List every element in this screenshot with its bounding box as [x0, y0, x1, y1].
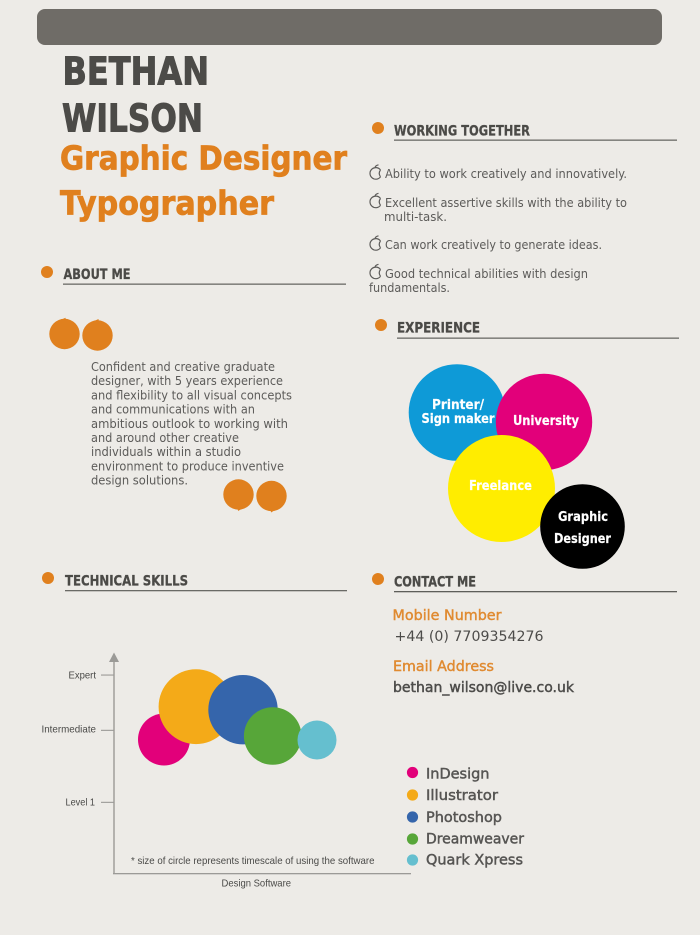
text: about me description: and communications with an [91, 403, 255, 417]
list: working together items: Good technical abilities with design [385, 267, 588, 281]
list: working together items [369, 165, 627, 295]
circle: university: University [513, 414, 579, 429]
heading: about me [41, 266, 346, 285]
top header bar [37, 9, 662, 45]
legend: design software: Photoshop [426, 810, 502, 826]
text: about me description: ambitious outlook to working with [91, 417, 288, 431]
circle: freelance [448, 435, 555, 542]
list: working together items: Excellent assertive skills with the ability to [385, 196, 627, 210]
panel: working together [369, 122, 677, 295]
circle: university [496, 374, 592, 470]
legend: design software: Illustrator [426, 788, 498, 804]
text: about me description: Confident and creative graduate [91, 360, 275, 374]
panel: contact me [372, 573, 677, 696]
axis labels: Expert [68, 670, 96, 682]
title: name and role [60, 50, 348, 222]
text: about me description: individuals within a studio [91, 445, 241, 459]
heading: contact me [372, 573, 677, 592]
circle: graphic designer: Graphic [558, 510, 608, 525]
contact: email address: bethan_wilson@live.co.uk [393, 680, 575, 696]
circle: freelance: Freelance [469, 479, 532, 494]
legend: design software: Dreamweaver [426, 832, 524, 848]
heading: technical skills: TECHNICAL SKILLS [65, 574, 188, 590]
axis labels: Intermediate [42, 724, 96, 736]
icon: opening quote marks [49, 318, 113, 351]
circle: graphic designer [540, 484, 625, 569]
list: working together items: Can work creatively to generate ideas. [385, 238, 602, 252]
panel: about me [41, 266, 346, 512]
axis labels [42, 670, 291, 890]
title: name and role: BETHAN [62, 50, 209, 94]
text: about me description: environment to produce inventive [91, 459, 284, 473]
heading: working together: WORKING TOGETHER [394, 124, 530, 140]
heading: experience: EXPERIENCE [397, 320, 480, 336]
icon: closing quote marks [223, 479, 287, 512]
text: about me description: and flexibility to all visual concepts [91, 388, 292, 402]
circle: printer / sign maker: Sign maker [422, 412, 495, 427]
list: working together items: multi-task. [384, 210, 447, 224]
contact: mobile number: +44 (0) 7709354276 [394, 629, 544, 645]
circle: printer / sign maker [409, 364, 505, 461]
circle: printer / sign maker: Printer/ [432, 398, 484, 413]
contact: email address [393, 659, 575, 696]
text: about me description [91, 360, 292, 488]
heading: about me: ABOUT ME [64, 267, 130, 283]
chart axes [101, 652, 411, 874]
text: about me description: designer, with 5 years experience [91, 374, 283, 388]
panel: experience [375, 319, 679, 569]
title: name and role: WILSON [62, 96, 203, 140]
contact: mobile number [392, 608, 544, 645]
legend: design software: InDesign [426, 766, 490, 782]
title: name and role: Graphic Designer [60, 138, 348, 178]
circle: graphic designer: Designer [554, 532, 612, 547]
legend: design software [407, 766, 524, 868]
axis labels: Level 1 [66, 796, 95, 808]
panel: technical skills [42, 572, 411, 890]
chart footnote: * size of circle represents timescale of using the software [131, 855, 375, 867]
bubbles [138, 669, 336, 766]
axis labels: Design Software [222, 878, 291, 890]
heading: contact me: CONTACT ME [394, 574, 476, 590]
text: about me description: design solutions. [91, 474, 188, 488]
legend: design software: Quark Xpress [426, 852, 523, 868]
heading: working together [372, 122, 677, 141]
heading: experience [375, 319, 679, 339]
bubble chart [42, 652, 411, 890]
contact: email address: Email Address [393, 659, 494, 675]
title: name and role: Typographer [60, 184, 275, 222]
list: working together items: fundamentals. [369, 281, 450, 295]
text: about me description: and around other creative [91, 431, 239, 445]
contact: mobile number: Mobile Number [392, 608, 502, 624]
heading: technical skills [42, 572, 347, 591]
list: working together items: Ability to work creatively and innovatively. [385, 167, 627, 181]
